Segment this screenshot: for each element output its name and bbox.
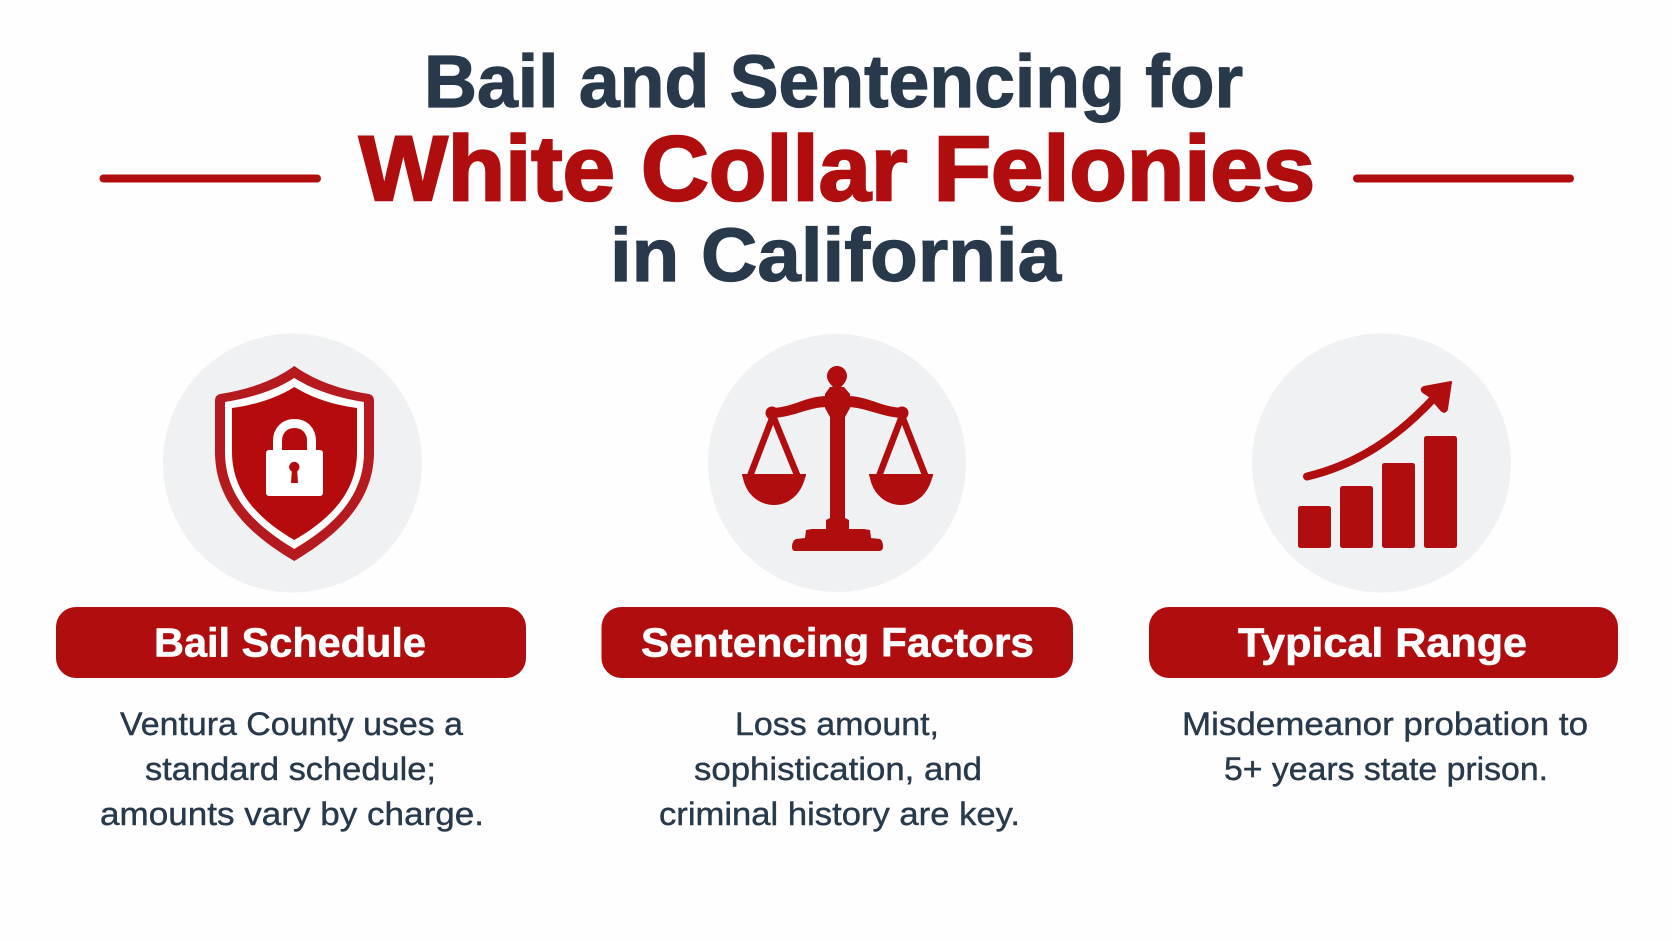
- text: sentencing factors description: sophistication, and: [694, 751, 982, 787]
- text: bail schedule description: standard schedule;: [145, 751, 436, 787]
- icon: shield with padlock: [163, 334, 422, 592]
- title: White Collar Felonies: [359, 118, 1315, 220]
- right title rule: [1353, 174, 1574, 182]
- title: in California: [610, 213, 1062, 297]
- pill: typical range: [1149, 607, 1618, 678]
- pill: sentencing factors: [602, 607, 1073, 678]
- pill: bail schedule: [56, 607, 526, 678]
- title: [359, 40, 1315, 297]
- left title rule: [100, 174, 321, 182]
- text: typical range description: [1182, 706, 1588, 787]
- pill: bail schedule: Bail Schedule: [154, 620, 426, 666]
- pill: sentencing factors: Sentencing Factors: [641, 620, 1034, 666]
- text: sentencing factors description: Loss amount,: [735, 706, 939, 742]
- text: sentencing factors description: criminal history are key.: [659, 796, 1020, 832]
- text: bail schedule description: [100, 706, 484, 832]
- text: bail schedule description: amounts vary by charge.: [100, 796, 484, 832]
- panel: typical range: [1149, 334, 1618, 787]
- panel: sentencing factors: [602, 334, 1073, 832]
- text: typical range description: Misdemeanor probation to: [1182, 706, 1588, 742]
- title: Bail and Sentencing for: [424, 40, 1243, 123]
- text: bail schedule description: Ventura County uses a: [120, 706, 463, 742]
- icon: scales of justice: [708, 334, 966, 592]
- icon: rising bar chart with arrow: [1252, 334, 1511, 592]
- text: sentencing factors description: [659, 706, 1020, 832]
- panel: bail schedule: [56, 334, 526, 832]
- text: typical range description: 5+ years state prison.: [1224, 751, 1548, 787]
- pill: typical range: Typical Range: [1238, 620, 1527, 666]
